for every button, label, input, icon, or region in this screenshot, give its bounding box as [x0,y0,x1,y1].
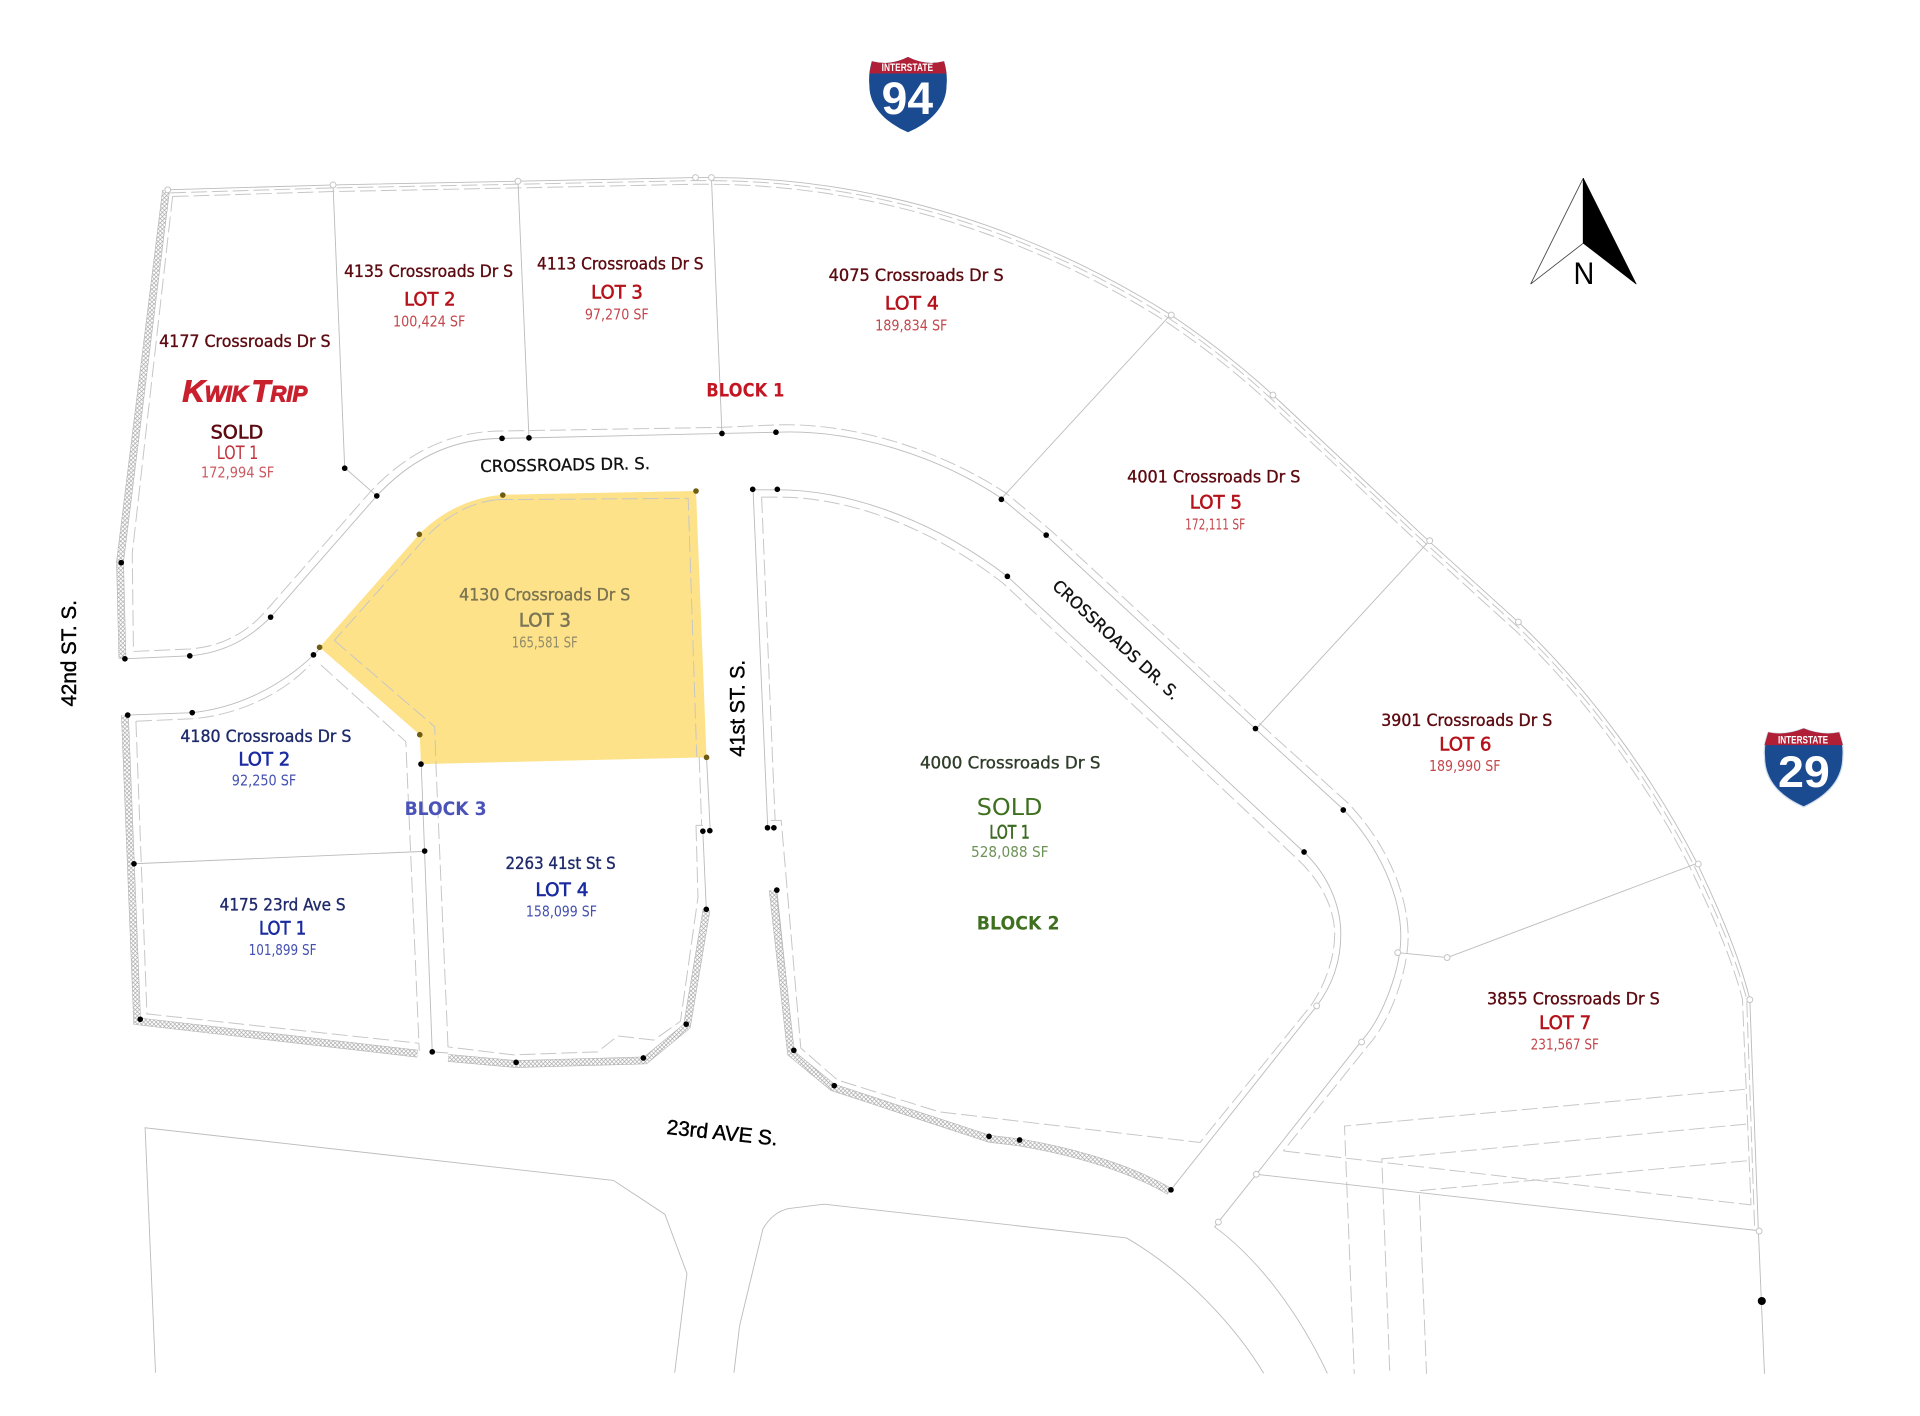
label: Block 1 Lot 5: 172,111 SF [1185,516,1245,533]
label: Block 3 Lot 2 [180,727,351,790]
label: Block 1 Lot 7 [1487,989,1660,1053]
label: Block 1 Lot 1 Kwik Trip sold [159,332,331,482]
label: Block 1 Lot 4 [829,266,1004,334]
label: Block 1 Lot 4: 4075 Crossroads Dr S [829,266,1004,285]
panel: site plan linework [118,175,1766,1374]
label: Block 1 Lot 7: LOT 7 [1539,1013,1591,1034]
label: Block 3 Lot 1: 4175 23rd Ave S [220,895,346,914]
label: Block 1 Lot 3: 97,270 SF [585,306,649,323]
label: Block 1 Lot 2: 100,424 SF [393,313,465,330]
label: Block 3 Lot 1: LOT 1 [259,919,306,940]
label: Block 1 Lot 7: 3855 Crossroads Dr S [1487,989,1660,1008]
label: Block 3 Lot 2: 92,250 SF [232,773,296,790]
label: Block 1 Lot 1 Kwik Trip sold: SOLD [211,422,263,443]
street label: 42nd St. S.: 42nd ST. S. [58,600,81,707]
label: Block 3 Lot 3 highlighted: 4130 Crossroads Dr S [459,585,630,604]
label: Block 3 Lot 4: LOT 4 [535,880,588,901]
hatched screening: Block 1 west edge [120,190,166,659]
label: Block 1 Lot 1 Kwik Trip sold: LOT 1 [217,443,258,464]
label: Block 3 Lot 2: 4180 Crossroads Dr S [180,727,351,746]
label: Block 1 Lot 6: LOT 6 [1439,734,1491,755]
south parcels [145,1128,1327,1373]
Block 1 lot dividers [333,178,1697,958]
survey pins: solid [118,429,1766,1305]
label: Block 3 Lot 4: 2263 41st St S [505,854,616,873]
label: Block 1 Lot 5: LOT 5 [1190,493,1242,514]
label: Block 1: BLOCK 1 [706,380,784,401]
label: Block 1 Lot 3: 4113 Crossroads Dr S [537,254,704,273]
icon: Interstate 29 shield: INTERSTATE [1778,734,1828,746]
street label: Crossroads Dr. S. diagonal: CROSSROADS DR. S. [1049,576,1183,704]
hatched screening: Block 2 south edge [773,890,1169,1191]
outer northeast property boundary [168,178,1764,1374]
label: Block 3 Lot 3 highlighted: LOT 3 [519,611,571,632]
label: Block 1 Lot 6: 189,990 SF [1429,758,1500,775]
highlighted parcel: Block 3 Lot 3 [320,491,707,764]
label: Block 3 Lot 4: 158,099 SF [526,903,597,920]
label: Block 1 Lot 5 [1127,467,1300,533]
label: Block 3 Lot 3 highlighted: 165,581 SF [512,635,578,652]
label: Block 3 Lot 1: 101,899 SF [249,942,317,959]
icon: north arrow: N [1573,255,1594,291]
label: Block 3 Lot 4 [505,854,616,920]
Block 1 road edge [125,196,1408,1222]
survey pins: open [165,175,1762,1234]
label: Block 1 Lot 3 [537,254,704,323]
label: Block 1 Lot 1 Kwik Trip sold: 172,994 SF [201,465,274,482]
street label: 41st St. S.: 41st ST. S. [726,660,749,757]
icon: Interstate 94 shield: INTERSTATE [882,62,933,74]
label: Block 1 Lot 2: LOT 2 [404,289,456,310]
label: Block 1 Lot 2: 4135 Crossroads Dr S [344,262,513,281]
label: Block 1 Lot 6: 3901 Crossroads Dr S [1381,711,1552,730]
Block 3 outline [127,498,710,1055]
icon: Interstate 94 shield: 94 [882,73,933,124]
label: Block 2 Lot 1 sold: LOT 1 [989,822,1030,843]
icon: north arrow [1531,178,1636,291]
label: Block 1 Lot 7: 231,567 SF [1531,1036,1599,1053]
label: Block 1 Lot 3: LOT 3 [591,282,643,303]
logo: Kwik Trip: KWIKTRIP [182,375,308,409]
label: Block 1 Lot 2 [344,262,513,330]
Block 2 outline [753,490,1341,1190]
icon: Interstate 29 shield [1764,728,1843,807]
hatched screening: Block 3 edges [125,715,707,1064]
label: Block 2 Lot 1 sold [920,753,1100,861]
label: Block 1 Lot 4: 189,834 SF [875,317,947,334]
southeast easement lines [1256,1089,1758,1374]
icon: Interstate 29 shield: 29 [1778,748,1830,797]
label: Block 3: BLOCK 3 [405,799,487,820]
street label: 23rd Ave S.: 23rd AVE S. [666,1116,779,1150]
icon: Interstate 94 shield [869,57,947,132]
label: Block 1 Lot 6 [1381,711,1552,775]
label: Block 1 Lot 1 Kwik Trip sold: 4177 Crossroads Dr S [159,332,331,351]
label: Block 1 Lot 5: 4001 Crossroads Dr S [1127,467,1300,486]
label: Block 2 Lot 1 sold: 4000 Crossroads Dr S [920,753,1100,772]
label: Block 2 Lot 1 sold: 528,088 SF [971,844,1049,861]
label: Block 3 Lot 1 [220,895,346,959]
label: Block 3 Lot 2: LOT 2 [238,749,290,770]
label: Block 3 Lot 3 highlighted [459,585,630,652]
label: Block 2 Lot 1 sold: SOLD [977,794,1042,821]
label: Block 1 Lot 4: LOT 4 [885,293,939,314]
label: Block 2: BLOCK 2 [977,913,1060,934]
street label: Crossroads Dr. S. horizontal: CROSSROADS DR. S. [480,454,650,476]
